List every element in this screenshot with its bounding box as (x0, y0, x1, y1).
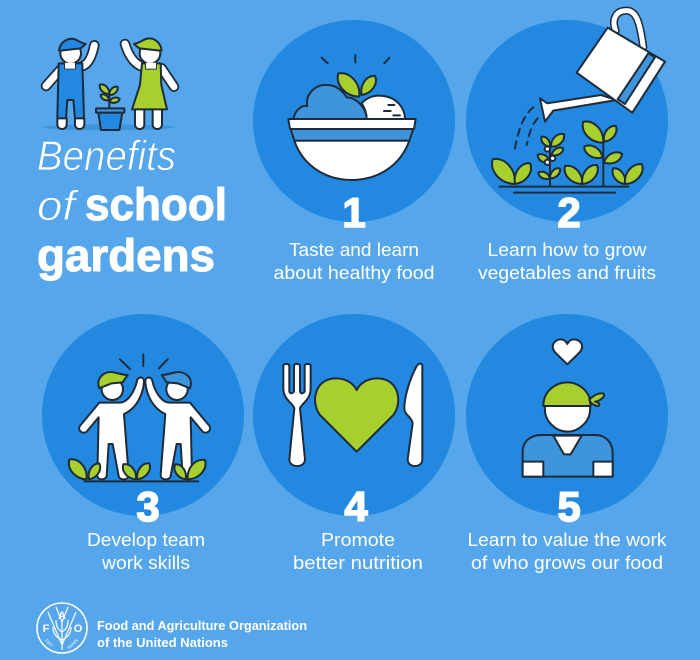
title: school (85, 179, 227, 230)
organisation name: of the United Nations (97, 636, 228, 650)
organisation name: Food and Agriculture Organization (97, 619, 307, 633)
title: of (37, 182, 80, 229)
caption 1: about healthy food (274, 263, 434, 283)
icon: children with potted plant (42, 38, 175, 130)
caption 4: better nutrition (293, 553, 423, 573)
number 5: 5 (557, 483, 581, 530)
caption 2: vegetables and fruits (478, 263, 656, 283)
panel: benefit 3 circle (42, 314, 244, 516)
caption 1: Taste and learn (289, 240, 419, 260)
title: Benefits (37, 132, 176, 179)
caption 5: Learn to value the work (468, 530, 668, 550)
title: gardens (37, 230, 215, 281)
caption 2: Learn how to grow (488, 240, 648, 260)
panel: benefit 2 circle (466, 20, 668, 222)
panel: benefit 5 circle (466, 314, 668, 516)
logo: FAO emblem: FIAT (44, 638, 54, 648)
caption 4: Promote (321, 530, 395, 550)
caption 3 (87, 530, 205, 573)
number 4: 4 (344, 483, 368, 530)
number 3: 3 (136, 483, 160, 530)
icon: watering can and seedlings (487, 11, 665, 193)
caption 2 (478, 240, 656, 283)
icon: two children high-fiving (65, 354, 210, 483)
logo: FAO emblem: PANIS (67, 638, 79, 650)
caption 1 (274, 240, 434, 283)
caption 4 (293, 530, 423, 573)
logo: FAO emblem (37, 603, 87, 653)
caption 5 (468, 530, 668, 573)
logo: FAO emblem: O (74, 623, 83, 635)
caption 5: of who grows our food (471, 553, 663, 573)
caption 3: Develop team (87, 530, 205, 550)
icon: fork, heart and knife (283, 364, 422, 466)
icon: farmer with heart (523, 339, 613, 477)
number 1: 1 (342, 189, 366, 236)
panel: benefit 1 circle (253, 20, 455, 222)
panel: benefit 4 circle (253, 314, 455, 516)
logo: FAO emblem: F (43, 623, 50, 635)
title (37, 132, 227, 281)
icon: salad bowl (288, 55, 416, 180)
caption 3: work skills (101, 553, 190, 573)
number 2: 2 (557, 189, 581, 236)
logo: FAO emblem: A (58, 610, 66, 622)
organisation name (97, 619, 307, 650)
